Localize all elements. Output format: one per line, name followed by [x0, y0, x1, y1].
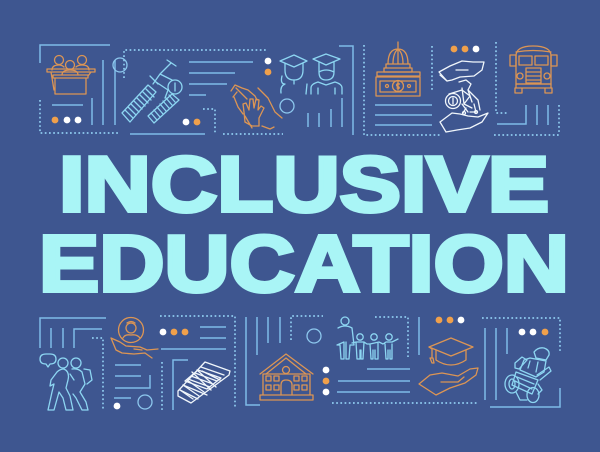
- icon: adult with children: [337, 317, 398, 359]
- title: INCLUSIVE: [59, 140, 549, 228]
- icon: school building: [260, 354, 313, 400]
- icon: capitol with money: [376, 42, 420, 96]
- icon: wheelchair on ramp: [122, 60, 182, 123]
- icon: powered wheelchair: [505, 348, 551, 402]
- title: [39, 140, 569, 308]
- title: EDUCATION: [39, 219, 569, 308]
- icon: speech bubble and walking friends: [40, 354, 92, 410]
- icon: hands protecting wheelchair: [439, 61, 488, 132]
- icon: graduation cap over hand: [419, 338, 478, 395]
- icon: hand holding person: [111, 318, 158, 358]
- accent dots: [52, 46, 548, 409]
- icon: calculator: [178, 362, 230, 403]
- icon: school bus: [510, 46, 557, 93]
- icon: graduates: [280, 54, 342, 94]
- icon: people at a desk: [47, 56, 95, 94]
- icon: hands touching: [231, 85, 282, 129]
